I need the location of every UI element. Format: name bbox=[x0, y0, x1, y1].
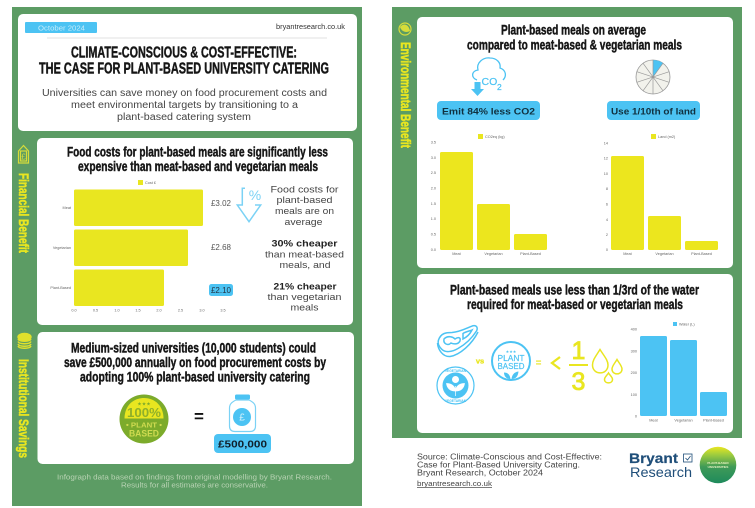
icon: CO2 cloud: CO bbox=[482, 76, 497, 88]
bar chart: water: 400 bbox=[631, 328, 637, 332]
title: THE CASE FOR PLANT-BASED UNIVERSITY CATERING bbox=[39, 60, 329, 78]
bar chart: cost: 2.0 bbox=[156, 308, 162, 312]
panel: header bbox=[18, 14, 357, 131]
panel: institutional savings card bbox=[38, 332, 354, 464]
heading bbox=[64, 340, 326, 384]
subtitle: meet environmental targets by transitioning to a bbox=[71, 100, 298, 111]
bar chart: cost: Plant-Based bbox=[50, 286, 71, 290]
icon: vegetarian badge: VEGETARIAN bbox=[445, 369, 467, 373]
icon: pound receipt bbox=[18, 146, 28, 163]
bar chart: water: Vegetarian bbox=[674, 418, 693, 422]
callout: £500,000: £500,000 bbox=[218, 440, 268, 450]
bar chart: cost: 0.5 bbox=[93, 308, 98, 312]
icon: less than one third: 3 bbox=[572, 368, 585, 396]
logo: plant-based universities: PLANT-BASED bbox=[707, 461, 729, 465]
icon: land pie one tenth bbox=[636, 60, 670, 94]
icon: vegetarian badge: VEGETARIAN bbox=[445, 399, 467, 403]
equals sign: = bbox=[536, 358, 542, 369]
heading: expensive than meat-based and vegetarian meals bbox=[78, 159, 318, 174]
bar chart: land: 6 bbox=[606, 202, 608, 206]
bar chart: cost: 0.0 bbox=[71, 308, 77, 312]
logo: Bryant Research: Research bbox=[630, 464, 692, 480]
icon: plant based badge bbox=[492, 342, 530, 380]
footnote: Infograph data based on findings from original modelling by Bryant Research. bbox=[57, 474, 332, 482]
icon: steak bbox=[438, 326, 478, 357]
bar chart: CO2: Plant-Based bbox=[520, 252, 541, 256]
bar chart: CO2: Meat bbox=[452, 252, 462, 256]
icon: less than one third bbox=[552, 337, 588, 396]
text: percentage savings: than vegetarian bbox=[268, 292, 342, 303]
heading: required for meat-based or vegetarian meals bbox=[467, 297, 683, 312]
bar chart: cost: 3.5 bbox=[220, 308, 226, 312]
bar chart: cost: 1.0 bbox=[114, 308, 120, 312]
bar chart: land: 0 bbox=[606, 248, 608, 252]
icon: plant based badge: BASED bbox=[498, 361, 524, 371]
date pill bbox=[25, 22, 97, 33]
bar chart: CO2: 0.5 bbox=[431, 232, 436, 236]
bar chart: cost: 2.5 bbox=[178, 308, 183, 312]
icon: CO2 cloud bbox=[471, 58, 505, 96]
heading bbox=[450, 282, 700, 312]
bar chart: CO2: Vegetarian bbox=[484, 252, 503, 256]
bar chart: water: 300 bbox=[631, 350, 637, 354]
bar chart: CO2: CO2eq (kg) bbox=[485, 135, 505, 139]
text: percentage savings: Food costs for bbox=[270, 184, 338, 196]
side label: financial benefit: Financial Benefit bbox=[16, 173, 32, 253]
side label: environmental benefit: Environmental Benefit bbox=[398, 42, 414, 148]
heading: compared to meat-based & vegetarian meals bbox=[467, 38, 682, 52]
callout: use 1/10th of land bbox=[607, 101, 700, 120]
heading: Plant-based meals on average bbox=[501, 22, 646, 38]
equals sign: = bbox=[194, 407, 204, 426]
text: percentage savings: meals are on bbox=[275, 206, 334, 217]
bar chart: cost: Vegetarian bbox=[53, 246, 71, 250]
icon: less than one third: 1 bbox=[572, 337, 585, 365]
text: percentage savings: meals, and bbox=[280, 260, 330, 271]
logo: Bryant Research bbox=[629, 450, 692, 480]
heading: Food costs for plant-based meals are significantly less bbox=[67, 144, 328, 160]
panel: emissions and land card bbox=[417, 17, 733, 268]
bar chart: land: Meat bbox=[623, 252, 633, 256]
bar chart: water: Meat bbox=[649, 418, 659, 422]
icon: leaf globe bbox=[399, 23, 411, 35]
bar chart: CO2: 2.0 bbox=[431, 186, 436, 190]
bar chart: cost: Cost £ bbox=[145, 181, 157, 185]
bar chart: land: Vegetarian bbox=[655, 252, 674, 256]
icon: plant based badge: ★★★ bbox=[506, 349, 517, 354]
panel: water card bbox=[417, 274, 733, 433]
date pill: October 2024 bbox=[38, 24, 85, 32]
logo: plant-based universities: UNIVERSITIES bbox=[708, 465, 728, 469]
title bbox=[39, 44, 329, 78]
icon: percent down arrow: % bbox=[249, 187, 261, 203]
subtitle bbox=[42, 88, 327, 123]
heading bbox=[467, 22, 682, 52]
bar chart: cost: Meat bbox=[63, 206, 72, 210]
heading: Medium-sized universities (10,000 students) could bbox=[71, 340, 316, 356]
panel: financial benefit card bbox=[37, 138, 353, 325]
bar chart: land: 10 bbox=[604, 172, 608, 176]
text: percentage savings: average bbox=[284, 217, 322, 228]
bar chart: water: Water (L) bbox=[679, 322, 695, 326]
text: percentage savings bbox=[265, 184, 344, 314]
icon: percent down arrow bbox=[237, 187, 261, 222]
icon: plant based badge: PLANT bbox=[498, 353, 524, 363]
footnote: Results for all estimates are conservative. bbox=[121, 482, 268, 490]
bar chart: land: 2 bbox=[606, 233, 608, 237]
panel: left page bbox=[12, 7, 362, 506]
bar chart: land: Plant-Based bbox=[691, 252, 712, 256]
callout: emit 84% less CO2 bbox=[437, 101, 540, 120]
heading bbox=[67, 144, 328, 174]
vs label: vs bbox=[476, 356, 484, 366]
bar chart: CO2: 1.0 bbox=[431, 217, 436, 221]
icon: 100% plant based badge: • PLANT • bbox=[126, 420, 162, 430]
source citation: Source: Climate-Conscious and Cost-Effective: bbox=[417, 452, 602, 462]
text: percentage savings: than meat-based bbox=[265, 250, 344, 260]
bar chart: water: 0 bbox=[635, 414, 637, 418]
callout: use 1/10th of land: Use 1/10th of land bbox=[611, 106, 696, 118]
icon: coin stack bbox=[18, 334, 31, 348]
source citation bbox=[417, 452, 602, 488]
bar chart: water bbox=[631, 322, 727, 422]
heading: adopting 100% plant-based university catering bbox=[80, 370, 310, 384]
text: percentage savings: 21% cheaper bbox=[274, 282, 337, 292]
subtitle: Universities can save money on food procurement costs and bbox=[42, 88, 327, 99]
bar chart: water: 200 bbox=[631, 371, 637, 375]
bar chart: land: 14 bbox=[604, 142, 608, 146]
source citation: Bryant Research, October 2024 bbox=[417, 468, 544, 478]
bar chart: CO2: 3.5 bbox=[431, 140, 436, 144]
logo: Bryant Research: Bryant bbox=[629, 450, 678, 466]
source citation: bryantresearch.co.uk bbox=[417, 481, 493, 488]
callout: emit 84% less CO2: Emit 84% less CO2 bbox=[442, 106, 535, 118]
bar chart: cost: 3.0 bbox=[199, 308, 205, 312]
heading: save £500,000 annually on food procurement costs by bbox=[64, 355, 326, 370]
icon: money jar bbox=[230, 394, 256, 432]
icon: vegetarian badge bbox=[437, 367, 474, 404]
side label: institutional savings: Institutional Savings bbox=[16, 359, 32, 458]
icon: 100% plant based badge: ★★★ bbox=[137, 402, 151, 408]
bar chart: land: 12 bbox=[604, 156, 608, 160]
website: bryantresearch.co.uk bbox=[276, 24, 346, 31]
bar chart: CO2: 2.5 bbox=[431, 171, 436, 175]
title: CLIMATE-CONSCIOUS & COST-EFFECTIVE: bbox=[71, 44, 297, 62]
icon: water drops bbox=[592, 350, 622, 383]
text: percentage savings: plant-based bbox=[276, 195, 332, 206]
bar chart: cost: £2.10 bbox=[211, 286, 232, 295]
subtitle: plant-based catering system bbox=[117, 112, 251, 123]
bar chart: cost bbox=[50, 180, 233, 312]
bar chart: land: Land (m2) bbox=[658, 135, 676, 139]
bar chart: CO2: 1.5 bbox=[431, 202, 436, 206]
bar chart: water: 100 bbox=[631, 393, 637, 397]
icon: money jar: £ bbox=[239, 412, 245, 424]
panel: right page bbox=[392, 7, 742, 438]
icon: 100% plant based badge: 100% bbox=[127, 405, 161, 420]
bar chart: CO2 bbox=[431, 134, 547, 256]
bar chart: CO2: 0.0 bbox=[431, 248, 436, 252]
bar chart: cost: £3.02 bbox=[211, 199, 232, 208]
bar chart: cost: £2.68 bbox=[211, 243, 232, 252]
bar chart: land bbox=[604, 134, 718, 256]
icon: pound receipt: £ bbox=[21, 152, 26, 162]
text: percentage savings: 30% cheaper bbox=[272, 238, 338, 250]
bar chart: cost: 1.5 bbox=[135, 308, 141, 312]
text: percentage savings: meals bbox=[290, 302, 319, 314]
bar chart: CO2: 3.0 bbox=[431, 156, 436, 160]
bar chart: land: 8 bbox=[606, 187, 608, 191]
icon: 100% plant based badge: BASED bbox=[129, 428, 159, 438]
bar chart: water: Plant-Based bbox=[703, 418, 724, 422]
logo: plant-based universities bbox=[700, 447, 736, 483]
icon: 100% plant based badge bbox=[120, 394, 168, 444]
icon: CO2 cloud: 2 bbox=[497, 82, 502, 92]
source citation: Case for Plant-Based University Catering. bbox=[417, 460, 580, 470]
callout: £500,000 bbox=[214, 434, 271, 453]
footnote bbox=[57, 474, 332, 490]
bar chart: land: 4 bbox=[606, 218, 608, 222]
